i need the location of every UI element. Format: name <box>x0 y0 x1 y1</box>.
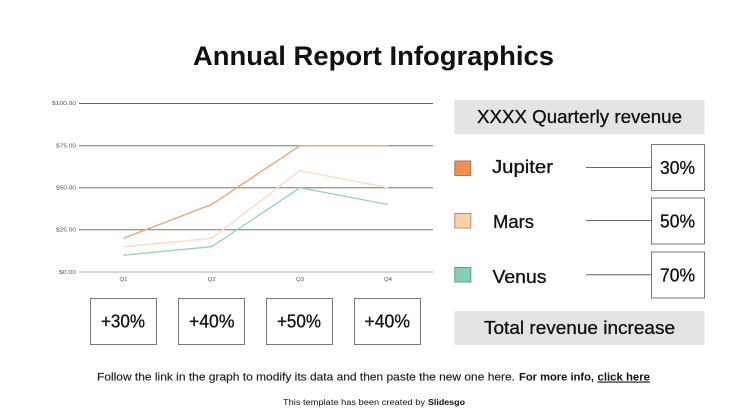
panel: total revenue increase: Total revenue increase <box>484 318 675 338</box>
x axis labels: Q4 <box>384 277 392 283</box>
legend row: Jupiter: Jupiter <box>492 157 553 177</box>
legend row: Mars: Mars <box>493 212 534 232</box>
box: Q3 increase <box>266 298 332 344</box>
box: Q4 increase: +40% <box>364 312 410 332</box>
credit line <box>283 398 465 407</box>
y axis labels: $75.00 <box>56 144 76 150</box>
box: Q4 increase <box>354 298 420 344</box>
x axis labels <box>120 277 392 283</box>
legend row: Mars <box>455 198 704 244</box>
x axis labels: Q3 <box>296 277 304 283</box>
box: Q1 increase <box>90 298 156 344</box>
box: Q3 increase: +50% <box>277 312 321 332</box>
panel: quarterly revenue heading: XXXX Quarterly revenue <box>477 107 682 127</box>
series: Mars <box>124 171 388 247</box>
x axis labels: Q2 <box>208 277 216 283</box>
credit line: Slidesgo <box>428 398 465 407</box>
series: Jupiter <box>124 146 388 238</box>
y axis labels: $50.00 <box>56 186 76 192</box>
y axis labels <box>52 101 76 276</box>
legend row: Mars: 50% <box>660 212 695 232</box>
legend row: Jupiter: 30% <box>660 158 695 178</box>
series: Venus <box>124 188 388 255</box>
y axis labels: $0.00 <box>59 270 76 276</box>
footnote: For more info, <box>519 372 594 384</box>
footnote: Follow the link in the graph to modify its data and then paste the new one here. <box>97 372 515 384</box>
box: Q2 increase <box>178 298 244 344</box>
legend row: Venus <box>455 252 704 298</box>
box: Q2 increase: +40% <box>189 312 234 332</box>
panel: quarterly revenue heading <box>454 100 704 134</box>
legend row: Venus: Venus <box>492 267 546 287</box>
legend row: Venus: 70% <box>660 266 695 286</box>
panel: total revenue increase <box>454 311 704 345</box>
quarterly increase boxes <box>90 298 420 344</box>
line chart <box>52 101 433 283</box>
legend row: Jupiter <box>455 144 704 190</box>
title: Annual Report Infographics <box>193 41 554 71</box>
footnote: click here <box>598 372 650 384</box>
box: Q1 increase: +30% <box>101 312 145 332</box>
y axis labels: $25.00 <box>56 228 76 234</box>
y axis labels: $100.00 <box>52 101 76 107</box>
credit line: This template has been created by <box>283 398 425 407</box>
x axis labels: Q1 <box>120 277 128 283</box>
footnote <box>97 372 650 384</box>
